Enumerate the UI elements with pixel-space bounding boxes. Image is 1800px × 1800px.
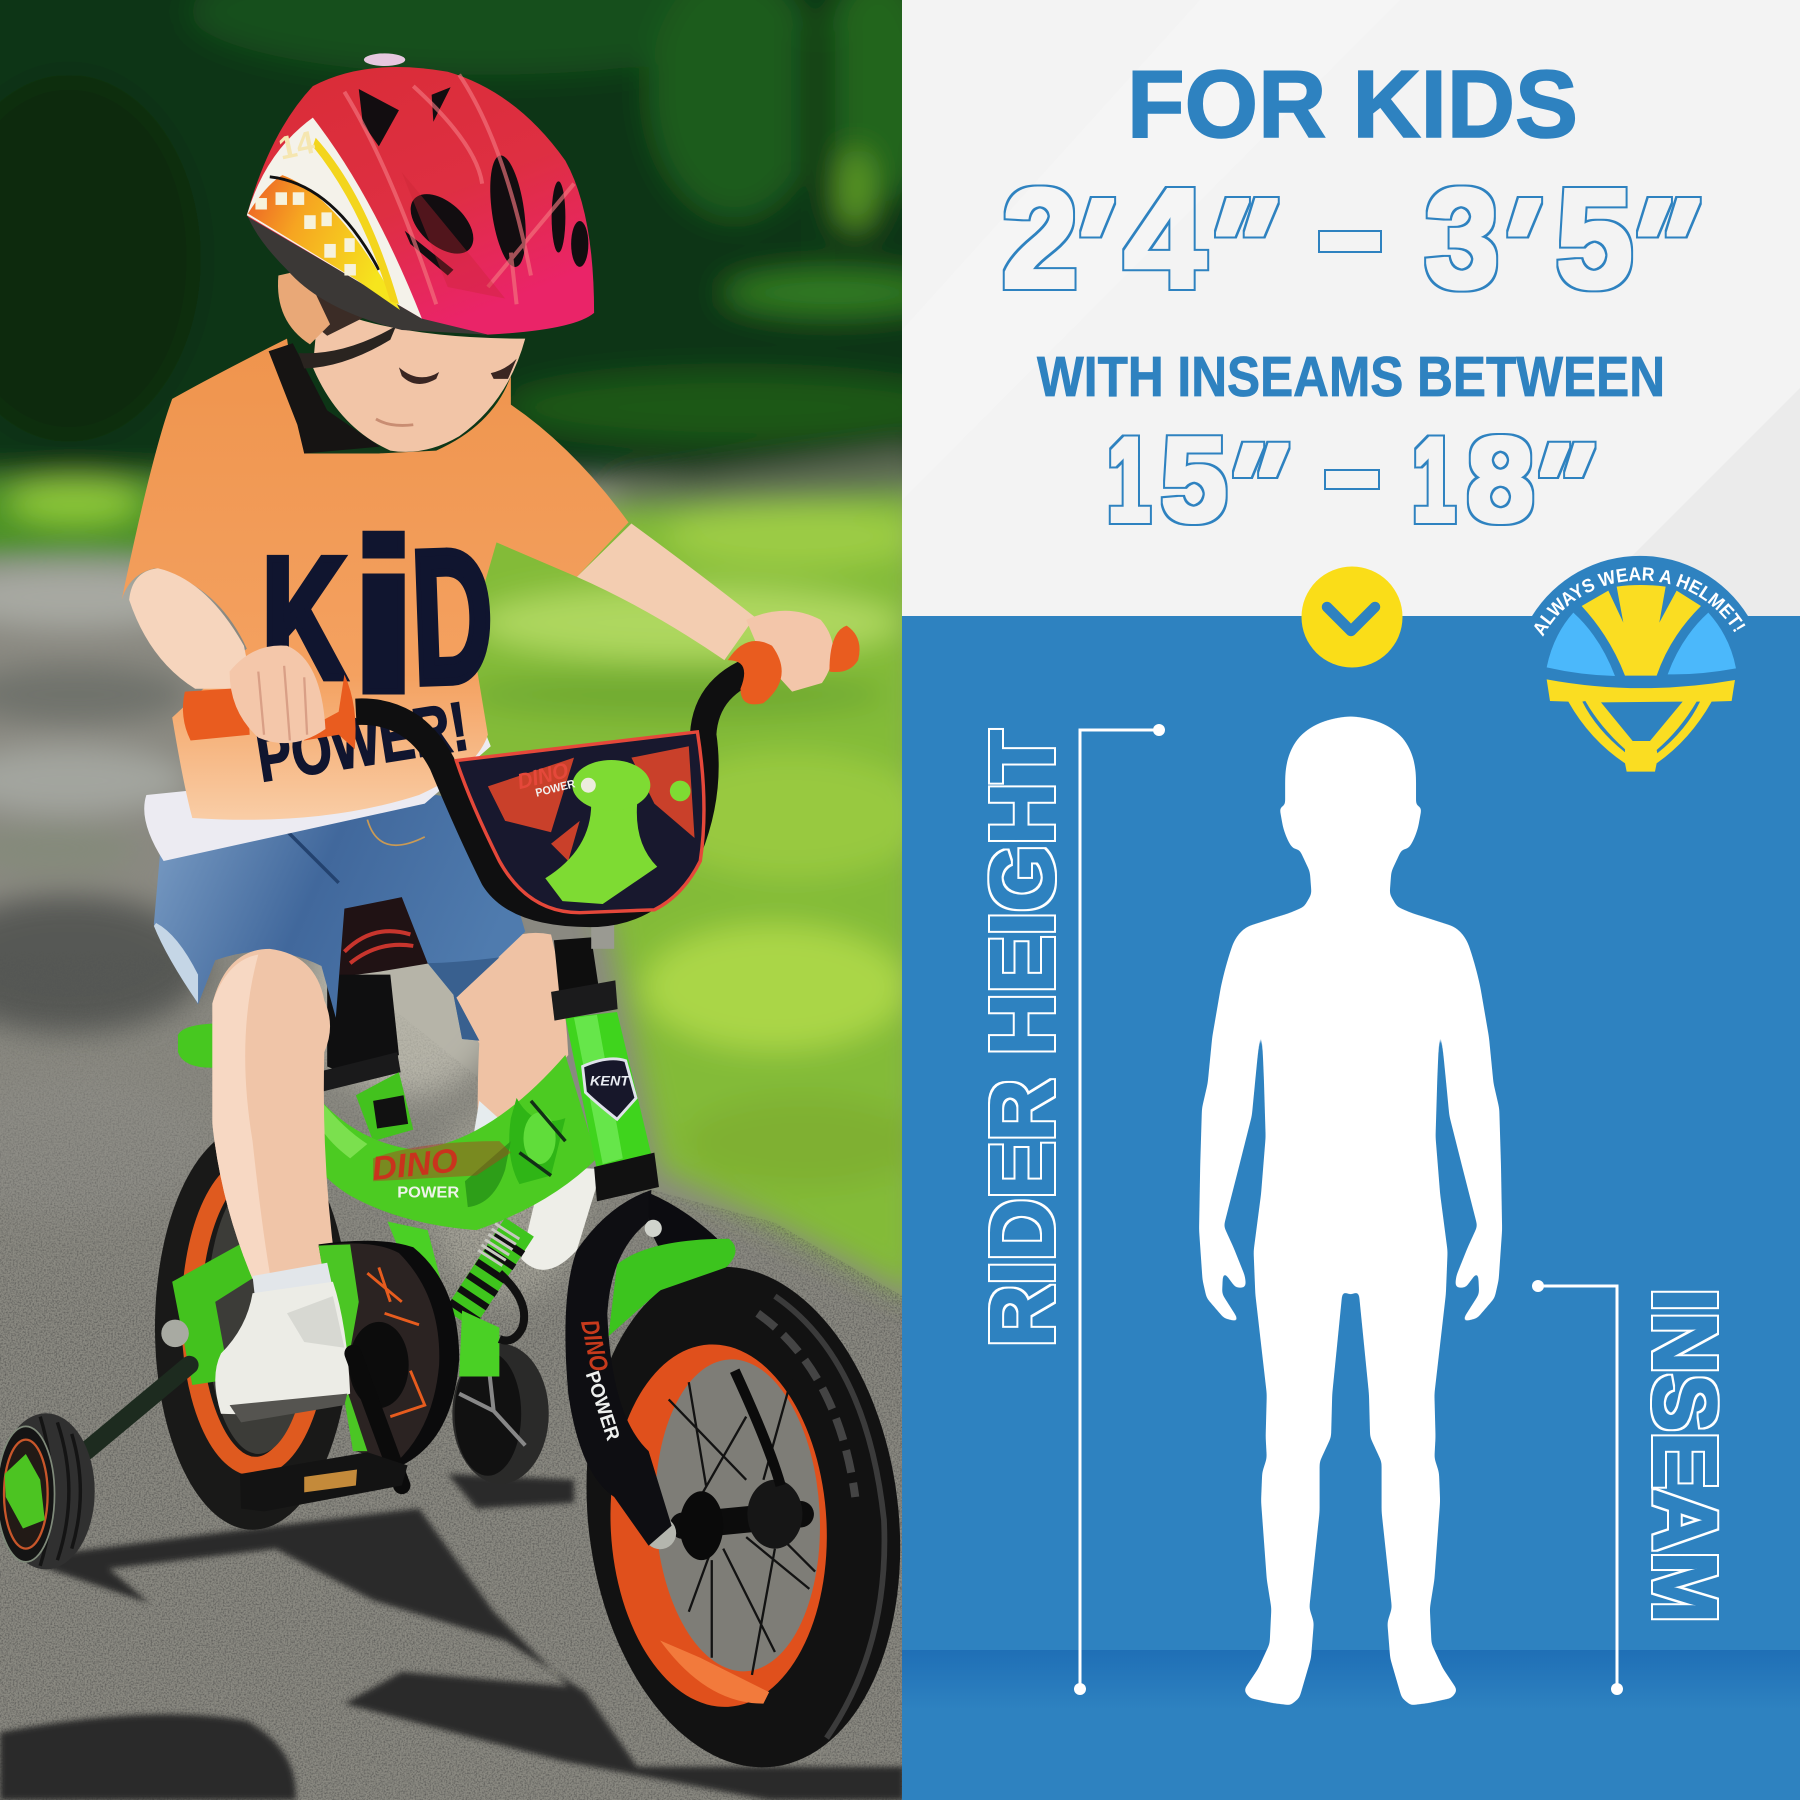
rider height range: 2 (1002, 159, 1078, 317)
road shadows (0, 1474, 904, 1800)
left leg (212, 949, 336, 1279)
left arm (129, 568, 253, 689)
icon: always wear a helmet badge: ALWAYS WEAR A HELMET! (1534, 567, 1746, 637)
icon: yellow chevron down button (1302, 566, 1402, 668)
shirt print: KiD POWER!: K (262, 522, 346, 714)
frame decal: dino power (370, 1141, 511, 1201)
front fork (565, 1153, 723, 1546)
rider height range: " (1596, 171, 1718, 325)
steering stem (551, 925, 618, 1021)
blurred park background (0, 0, 976, 1303)
left sock and shoe (215, 1263, 350, 1422)
helmet: 14 (275, 124, 318, 166)
rider height measurement line (1074, 724, 1165, 1695)
inseam range: 8 (1467, 413, 1534, 547)
face (278, 267, 525, 452)
inseam range (1108, 413, 1610, 554)
inseam range: 1 (1413, 413, 1455, 547)
inseam range: " (1197, 420, 1304, 554)
inseam range: " (1503, 420, 1610, 554)
rider height range: 5 (1556, 159, 1633, 317)
shirt print: KiD POWER! (256, 530, 490, 782)
label: inseam: INSEAM (1634, 1288, 1734, 1623)
shirt print: KiD POWER!: POWER! (251, 687, 473, 797)
left grip and hand (183, 645, 356, 749)
road base (0, 455, 902, 1800)
panel: light grey header (902, 0, 1800, 620)
frame decal: dino power: DINO (370, 1142, 460, 1188)
upper body of child (122, 53, 860, 914)
handlebar (356, 666, 763, 914)
inseam measurement line (1532, 1280, 1623, 1695)
rider height range: 4 (1124, 159, 1206, 317)
heading: FOR KIDS: FOR KIDS (1127, 51, 1578, 158)
inseam range: 1 (1108, 413, 1150, 547)
left training wheel (0, 1413, 95, 1569)
head badge (583, 1059, 636, 1119)
inseam range: 5 (1161, 413, 1227, 547)
right arm (577, 523, 755, 660)
number plate: POWER (535, 778, 577, 800)
green bike frame (172, 1012, 651, 1385)
number plate (456, 732, 704, 913)
icon: always wear a helmet badge (1532, 556, 1748, 772)
pedal and crank (240, 1353, 408, 1511)
asphalt grain (0, 947, 904, 1800)
subheading: with inseams between: WITH INSEAMS BETWEEN (1037, 345, 1665, 409)
rear wheel (155, 1126, 350, 1530)
right leg and shoe (453, 933, 602, 1270)
photo: child riding green bike (0, 0, 976, 1800)
lower bike, legs and road shadows (0, 795, 928, 1800)
shirt print: KiD POWER!: D (408, 510, 496, 724)
right grip and hand (728, 611, 860, 704)
right training wheel (452, 1344, 549, 1484)
child silhouette (1200, 717, 1502, 1705)
front fender (608, 1239, 736, 1336)
chin strap (298, 326, 396, 369)
front fork: DINO (575, 1317, 613, 1374)
neck strap (269, 343, 380, 453)
front wheel (586, 1266, 900, 1768)
head badge: KENT (590, 1073, 631, 1088)
frame decal: dino power: POWER (397, 1184, 459, 1201)
label: rider height: RIDER HEIGHT (973, 730, 1073, 1347)
rear training wheel arm (86, 1365, 189, 1451)
helmet (247, 53, 594, 335)
number plate: DINO (515, 757, 571, 794)
rider height range: ' (1468, 171, 1557, 325)
rider height range (1002, 159, 1718, 325)
panel: blue measurement area (902, 616, 1800, 1800)
rider height range: " (1174, 171, 1296, 325)
orange t-shirt (122, 339, 629, 820)
front fork: POWER (581, 1368, 624, 1443)
seat and seat post (178, 891, 430, 1092)
shirt print: KiD POWER!: i (348, 496, 420, 739)
rider height range: ' (1041, 171, 1130, 325)
denim shorts (154, 795, 525, 1041)
white undershirt (144, 737, 491, 861)
chain guard (319, 1241, 459, 1465)
rear axle nut (161, 1320, 189, 1347)
rider height range: 3 (1425, 159, 1499, 317)
